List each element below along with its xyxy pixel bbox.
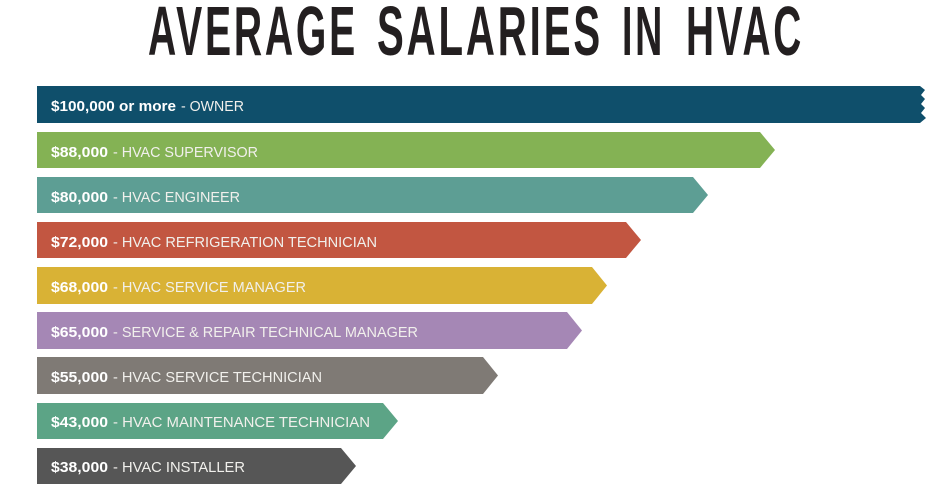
title: [148, 0, 804, 70]
bar: HVAC refrigeration technician: - HVAC REFRIGERATION TECHNICIAN: [113, 234, 377, 251]
bar: HVAC supervisor: [37, 132, 775, 168]
bar: HVAC maintenance technician: - HVAC MAINTENANCE TECHNICIAN: [113, 414, 370, 431]
bar: HVAC refrigeration technician: $72,000: [51, 234, 108, 251]
bar: HVAC supervisor: $88,000: [51, 144, 108, 161]
bar: HVAC engineer: [37, 177, 708, 213]
bar: owner: $100,000 or more: [51, 98, 176, 115]
bar: owner: - OWNER: [181, 98, 244, 115]
bar: HVAC service technician: [37, 357, 498, 394]
bar: HVAC service manager: - HVAC SERVICE MANAGER: [113, 279, 306, 296]
bar: HVAC engineer: - HVAC ENGINEER: [113, 189, 240, 206]
bar: service and repair technical manager: - SERVICE & REPAIR TECHNICAL MANAGER: [113, 324, 418, 341]
bar: service and repair technical manager: [37, 312, 582, 349]
bar: HVAC service technician: $55,000: [51, 369, 108, 386]
bar: HVAC service technician: - HVAC SERVICE TECHNICIAN: [113, 369, 322, 386]
bar: HVAC service manager: $68,000: [51, 279, 108, 296]
bar: owner: [37, 86, 926, 123]
bar: HVAC refrigeration technician: [37, 222, 641, 258]
bar: HVAC maintenance technician: $43,000: [51, 414, 108, 431]
bar: HVAC maintenance technician: [37, 403, 398, 439]
bar: HVAC installer: - HVAC INSTALLER: [113, 459, 245, 476]
bar: HVAC installer: [37, 448, 356, 484]
bar: service and repair technical manager: $65,000: [51, 324, 108, 341]
bar: HVAC engineer: $80,000: [51, 189, 108, 206]
bar: HVAC installer: $38,000: [51, 459, 108, 476]
bar: HVAC service manager: [37, 267, 607, 304]
bar: HVAC supervisor: - HVAC SUPERVISOR: [113, 144, 258, 161]
